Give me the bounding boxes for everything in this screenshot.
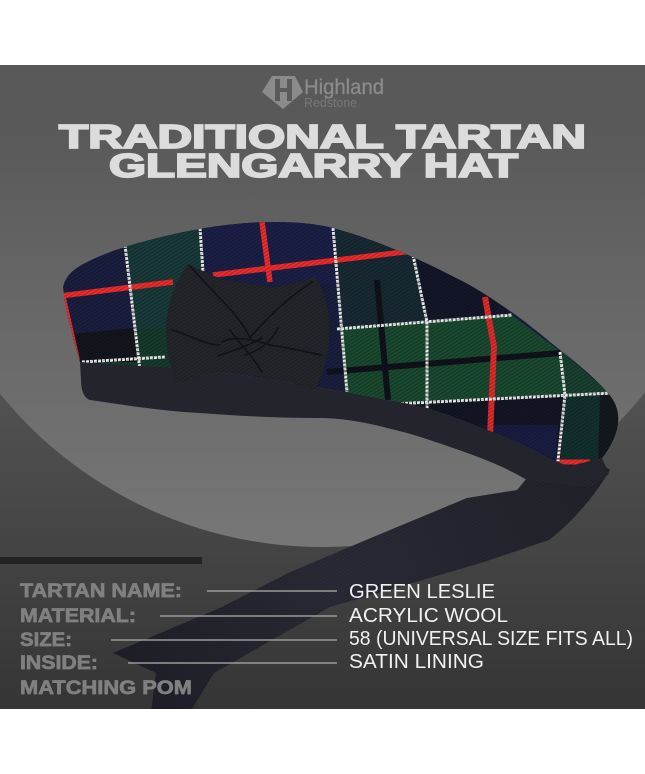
value: satin lining: SATIN LINING [349,651,484,673]
value: green leslie: GREEN LESLIE [349,581,495,603]
label: size: SIZE: [20,629,72,651]
hat tail ribbon [113,455,610,712]
hat: tartan crown [63,222,618,466]
spec values [349,581,633,673]
logo: Highland Redstone [262,76,384,110]
hat: bow [166,264,330,390]
tartan dark stripes [327,280,560,400]
bow knot folds [172,266,322,372]
spec connector lines [111,591,337,663]
logo wordmark: Highland [304,76,384,99]
hat: band [80,362,609,488]
label: inside: INSIDE: [20,652,98,674]
logo sub-wordmark: Redstone [304,95,357,110]
tartan red stripes [60,222,590,462]
title line 1: TRADITIONAL TARTAN [59,118,586,155]
divider bar [0,557,202,564]
spec labels [20,580,192,699]
background circle [0,198,645,547]
value: acrylic wool: ACRYLIC WOOL [349,605,508,627]
tartan white stripes [82,228,612,461]
label: tartan name: TARTAN NAME: [20,580,182,602]
title [59,118,586,184]
tartan colour blocks [60,220,625,465]
title line 2: GLENGARRY HAT [109,147,518,184]
icon: diamond H mark [262,76,303,109]
label: matching pom: MATCHING POM [20,677,192,699]
value: size: 58 (UNIVERSAL SIZE FITS ALL) [349,628,633,650]
label: material: MATERIAL: [20,605,136,627]
